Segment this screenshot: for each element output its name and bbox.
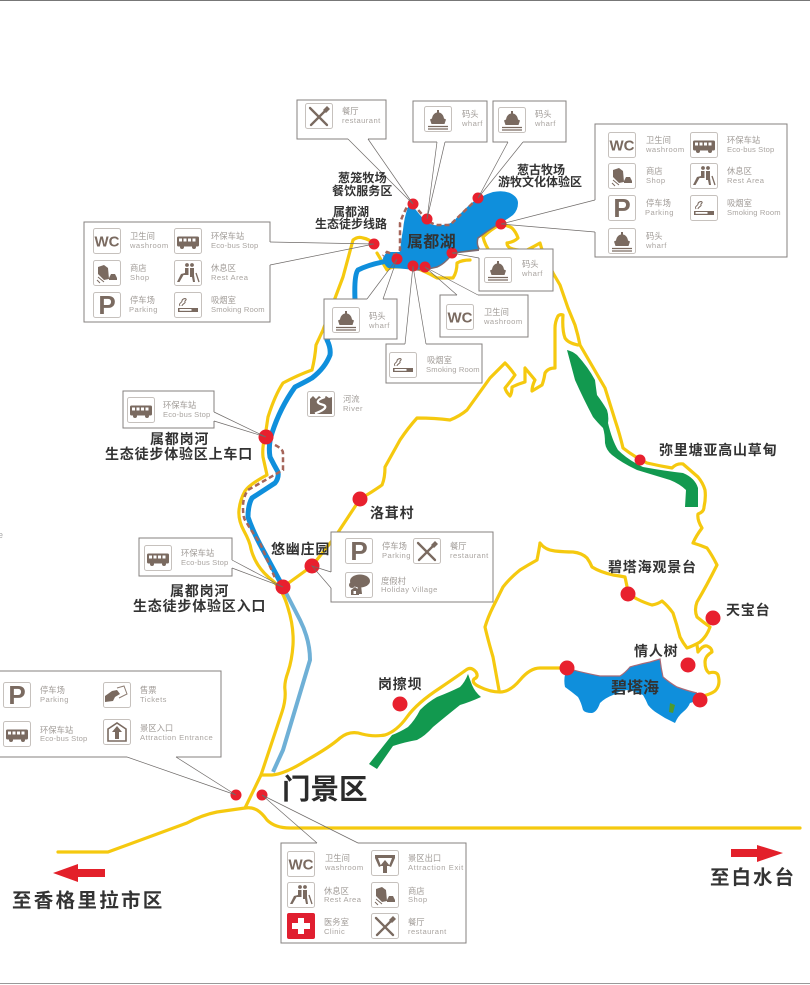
road: entrance road from Shangri-La and to Baishuitai	[58, 808, 800, 852]
item: wharf: wharf	[645, 241, 667, 250]
label: nomadic culture area: 游牧文化体验区	[498, 174, 582, 189]
legend: river: River	[343, 404, 363, 413]
item: attraction exit: Attraction Exit	[408, 863, 464, 872]
item: smoking room: Smoking Room	[727, 208, 781, 217]
road: loop around Bita viewpoint	[483, 224, 717, 690]
label: catering area: 餐饮服务区	[332, 183, 393, 198]
item: washroom: washroom	[129, 241, 169, 250]
panel: wharf southwest	[324, 259, 397, 339]
item: restaurant: restaurant	[342, 116, 381, 125]
item: eco-bus stop: 环保车站	[211, 231, 244, 241]
item: clinic: Clinic	[324, 927, 345, 936]
river	[248, 261, 388, 772]
item: rest area	[174, 260, 249, 286]
item: eco-bus stop	[174, 228, 258, 254]
panel: Youyou manor services	[312, 532, 493, 602]
panel: wharf northeast	[478, 101, 566, 198]
panel: east lake services	[501, 124, 787, 257]
item: washroom: washroom	[645, 145, 685, 154]
road: Bita Lake branch	[261, 668, 567, 775]
legend: river: 河流	[343, 394, 360, 404]
item: eco-bus stop: 环保车站	[40, 725, 73, 735]
item: attraction entrance	[104, 720, 213, 744]
item: eco-bus stop: Eco-bus Stop	[163, 410, 210, 419]
label: Conggu pasture: 葱古牧场	[517, 162, 565, 177]
meadow: Militangya	[567, 350, 698, 507]
item: restaurant	[306, 104, 381, 128]
item: parking: 停车场	[130, 295, 155, 305]
item: washroom	[94, 228, 169, 254]
item: restaurant: 餐厅	[408, 917, 425, 927]
item: restaurant: 餐厅	[342, 106, 359, 116]
item: shop	[372, 882, 428, 908]
item: washroom: WC	[610, 138, 635, 154]
item: washroom: 卫生间	[130, 231, 155, 241]
panel: eco-bus upper stop	[123, 391, 266, 437]
item: eco-bus stop	[4, 722, 87, 746]
item: eco-bus stop: 环保车站	[163, 400, 196, 410]
item: smoking room: 吸烟室	[211, 295, 236, 305]
lake shore: Bita	[567, 659, 697, 693]
label: Gangcaba: 岗擦坝	[378, 676, 422, 692]
panel: eco-bus entrance stop	[139, 538, 283, 587]
item: eco-bus stop	[144, 546, 228, 570]
item: washroom: washroom	[324, 863, 364, 872]
item: shop: 商店	[408, 886, 425, 896]
meadow: Gangcaba	[369, 674, 481, 769]
item: washroom: WC	[288, 856, 314, 874]
item: holiday village	[346, 572, 438, 598]
item: parking: 停车场	[40, 685, 65, 695]
road: east connector	[697, 645, 719, 696]
label: Shudu Gang River: 属都岗河	[150, 431, 209, 447]
item: rest area	[690, 164, 765, 188]
item: rest area: 休息区	[211, 263, 236, 273]
label: Tianbao terrace: 天宝台	[726, 602, 770, 618]
item: washroom: WC	[94, 234, 120, 250]
item: shop: Shop	[130, 273, 150, 282]
item: tickets: 售票	[140, 685, 157, 695]
item: rest area: 休息区	[324, 886, 349, 896]
label: to Baishuitai: 至白水台	[710, 866, 796, 889]
label: Bita Sea: 碧塔海	[611, 678, 659, 697]
item: smoking room	[390, 352, 480, 378]
panel: smoking room	[386, 266, 482, 383]
item: wharf	[424, 106, 483, 132]
item: clinic: 医务室	[324, 917, 349, 927]
label: to Shangri-La: 至香格里拉市区	[12, 889, 165, 912]
arrow: right to Baishuitai	[731, 845, 783, 862]
panel: gate entrance services	[0, 671, 236, 795]
panel: west lake services	[84, 222, 374, 322]
item: smoking room	[690, 196, 781, 220]
item: parking	[346, 536, 411, 566]
item: smoking room: Smoking Room	[426, 365, 480, 374]
label: trek entrance: 生态徒步体验区入口	[133, 598, 266, 614]
item: parking: Parking	[382, 551, 411, 560]
item: wharf: wharf	[461, 119, 483, 128]
panel: gate exit services	[262, 795, 466, 943]
item: wharf: 码头	[522, 259, 539, 269]
item: rest area	[288, 882, 362, 908]
item: parking	[4, 680, 69, 710]
item: attraction exit: 景区出口	[408, 853, 441, 863]
item: eco-bus stop: Eco-bus Stop	[727, 145, 774, 154]
item: holiday village: 度假村	[381, 576, 407, 586]
item: washroom: 卫生间	[646, 135, 671, 145]
item: wharf: wharf	[534, 119, 556, 128]
item: shop: Shop	[646, 176, 666, 185]
panel: restaurant	[297, 100, 413, 204]
item: parking	[94, 290, 158, 320]
item: parking: 停车场	[646, 198, 671, 208]
item: restaurant: restaurant	[450, 551, 489, 560]
item: tickets: Tickets	[140, 695, 167, 704]
item: washroom: 卫生间	[325, 853, 350, 863]
item: eco-bus stop: 环保车站	[181, 548, 214, 558]
label: Shudu Gang River: 属都岗河	[170, 583, 229, 599]
label: Youyou Manor: 悠幽庄园	[271, 541, 330, 557]
item: smoking room: Smoking Room	[211, 305, 265, 314]
item: washroom: washroom	[483, 317, 523, 326]
item: wharf	[332, 308, 390, 332]
item: eco-bus stop	[128, 398, 210, 422]
item: parking: 停车场	[382, 541, 407, 551]
item: shop: Shop	[408, 895, 428, 904]
item: shop	[94, 260, 150, 286]
item: washroom: 卫生间	[484, 307, 509, 317]
label: Bita Sea viewpoint: 碧塔海观景台	[608, 559, 697, 575]
item: washroom	[608, 132, 685, 158]
item: wharf	[608, 228, 667, 254]
road: central road from meadow to manor	[283, 315, 578, 587]
panel: washroom	[425, 267, 528, 337]
item: attraction exit	[372, 850, 464, 876]
label: trekking route: 生态徒步线路	[315, 216, 387, 231]
alpine meadows	[369, 350, 698, 769]
item: parking: P	[98, 290, 116, 320]
label: Shudu Lake: 属都湖	[407, 233, 456, 251]
trekking routes	[243, 198, 478, 578]
item: wharf: 码头	[462, 109, 479, 119]
item: washroom: WC	[448, 310, 473, 326]
item: parking	[608, 193, 674, 223]
item: wharf: 码头	[535, 109, 552, 119]
item: holiday village: Holiday Village	[381, 585, 438, 594]
item: washroom	[288, 852, 364, 876]
item: shop: 商店	[646, 166, 663, 176]
item: parking: P	[613, 193, 631, 223]
item: shop: 商店	[130, 263, 147, 273]
red location dots	[230, 192, 720, 800]
item: wharf: 码头	[646, 231, 663, 241]
item: attraction entrance: Attraction Entrance	[140, 733, 213, 742]
panel: wharf north	[413, 101, 487, 219]
island	[669, 703, 675, 713]
item: eco-bus stop	[690, 132, 774, 158]
label: Militangya meadow: 弥里塘亚高山草甸	[659, 442, 777, 458]
item: restaurant: 餐厅	[450, 541, 467, 551]
lake: Shudu	[383, 191, 518, 270]
item: rest area: 休息区	[727, 166, 752, 176]
label: Shudu Lake: 属都湖	[333, 204, 369, 219]
item: rest area: Rest Area	[211, 273, 249, 282]
item: eco-bus stop: 环保车站	[727, 135, 760, 145]
item: smoking room: 吸烟室	[427, 355, 452, 365]
item: wharf: wharf	[521, 269, 543, 278]
item: smoking room: 吸烟室	[727, 198, 752, 208]
road network	[58, 224, 800, 852]
item: parking: Parking	[129, 305, 158, 314]
lake: Bita	[564, 659, 700, 723]
item: attraction entrance: 景区入口	[140, 723, 173, 733]
item: tickets	[104, 682, 167, 708]
item: eco-bus stop: Eco-bus Stop	[181, 558, 228, 567]
item: parking: Parking	[645, 208, 674, 217]
item: shop	[608, 164, 666, 188]
item: rest area: Rest Area	[324, 895, 362, 904]
legend: river	[308, 392, 363, 416]
label: Gate area: 门景区	[282, 774, 368, 806]
item: washroom	[446, 304, 523, 330]
item: eco-bus stop: Eco-bus Stop	[40, 734, 87, 743]
item: wharf	[484, 258, 543, 282]
label: boarding point: 生态徒步体验区上车口	[105, 446, 253, 462]
label: Conglong pasture: 葱笼牧场	[338, 170, 387, 185]
item: clinic	[287, 913, 349, 939]
item: wharf	[498, 108, 556, 132]
item: parking: P	[350, 536, 368, 566]
label: Luorong Village: 洛茸村	[370, 505, 414, 521]
item: restaurant: restaurant	[408, 927, 447, 936]
panel: wharf south	[452, 249, 553, 291]
lake shore: Shudu	[413, 225, 497, 270]
item: smoking room	[174, 292, 265, 318]
item: rest area: Rest Area	[727, 176, 765, 185]
arrow: left to Shangri-La	[53, 864, 105, 882]
item: parking: P	[8, 680, 26, 710]
label: Lover tree: 情人树	[634, 643, 678, 659]
item: restaurant	[414, 538, 489, 564]
labels: place names	[12, 162, 796, 912]
item: parking: Parking	[40, 695, 69, 704]
road: lake south shore	[377, 253, 470, 278]
item: wharf: wharf	[368, 321, 390, 330]
item: restaurant	[372, 914, 447, 938]
item: wharf: 码头	[369, 311, 386, 321]
item: eco-bus stop: Eco-bus Stop	[211, 241, 258, 250]
road: west road up to Shudu Lake	[239, 237, 374, 808]
